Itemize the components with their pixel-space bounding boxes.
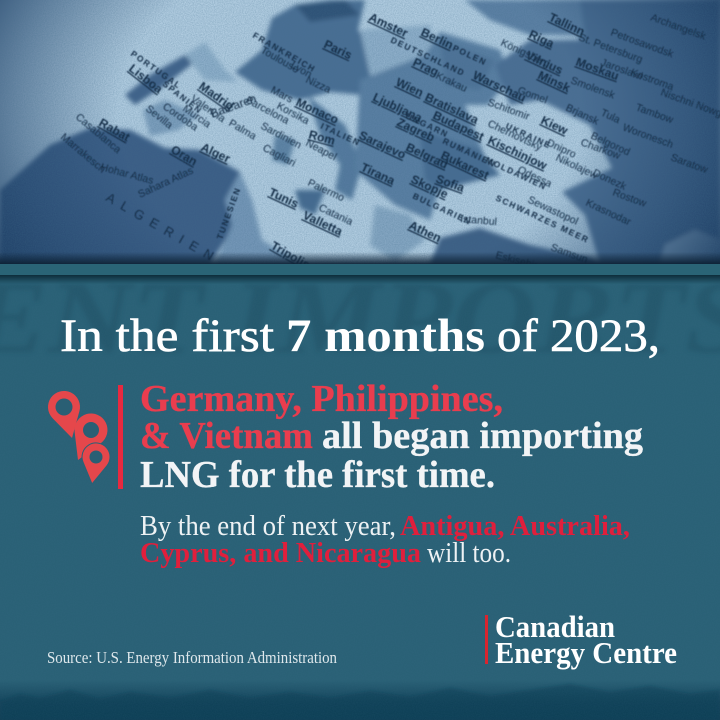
divider band: [0, 264, 720, 284]
map labels: Valencia: [188, 93, 228, 125]
map labels: Balearen: [208, 91, 258, 121]
map labels: Bukarest: [439, 148, 491, 182]
map labels: Gomel: [516, 85, 549, 106]
map labels: Schitomir: [486, 97, 532, 123]
map labels: Sardinien: [259, 120, 304, 152]
map labels: Sofia: [434, 172, 467, 195]
map grain: [0, 0, 720, 264]
main statement: & Vietnam: [140, 415, 313, 457]
map labels: Zagreb: [395, 115, 437, 145]
headline: [60, 310, 660, 362]
map labels: Casablanca: [73, 111, 123, 156]
headline: of 2023,: [497, 310, 660, 362]
headline: In the first: [60, 310, 274, 362]
map labels: Oran: [168, 142, 200, 169]
map labels: Krakau: [434, 70, 469, 95]
logo: Canadian Energy Centre: Energy Centre: [495, 635, 677, 670]
map labels: ITALIEN: [319, 121, 362, 148]
map labels: Tirana: [359, 160, 397, 188]
map labels: Skopje: [409, 172, 451, 201]
map labels: Nizza: [304, 74, 333, 96]
map labels: Barcelona: [244, 94, 291, 127]
map labels: Tallinn: [547, 10, 587, 39]
map labels: Jaroslawl: [599, 57, 644, 83]
map labels: Petrosawodsk: [609, 27, 676, 61]
map labels: Ljubljana: [371, 90, 425, 125]
logo: Canadian Energy Centre: Canadian: [495, 609, 615, 644]
map labels: Madrid: [196, 79, 237, 113]
map labels: Moskau: [574, 55, 621, 83]
map labels: ALGERIEN: [104, 190, 223, 267]
map labels: Valletta: [301, 208, 345, 239]
panel grain: [0, 284, 720, 720]
pin 1: [48, 391, 80, 438]
map bottom shadow: [0, 252, 720, 264]
map labels: Tula: [599, 107, 622, 126]
map labels: Hohar Atlas: [99, 161, 155, 187]
map labels: Belgrad: [404, 140, 450, 172]
map labels: BULGARIEN: [411, 191, 473, 227]
map labels: Rabat: [96, 115, 132, 144]
main statement: LNG for the first time.: [140, 454, 495, 496]
map labels: Donezk: [591, 167, 629, 193]
map labels: Istanbul: [460, 213, 497, 228]
map labels: Sevilla: [143, 103, 175, 132]
map labels: Toulouse: [258, 44, 301, 76]
vignette: [0, 0, 720, 264]
map labels: Minsk: [536, 68, 573, 95]
map labels: Cordoba: [160, 101, 200, 134]
map labels: Warschau: [471, 68, 528, 105]
map labels: Eskisehir: [494, 249, 539, 272]
secondary statement: Cyprus, and Nicaragua: [140, 537, 421, 569]
secondary statement: will too.: [427, 537, 511, 569]
map labels: Nikolajew: [554, 152, 600, 182]
map labels: FRANKREICH: [251, 30, 318, 74]
map labels: Rostow: [611, 187, 648, 210]
map labels: Korsika: [275, 100, 311, 127]
map labels: Prag: [411, 55, 441, 79]
map labels: UNGARN: [404, 111, 450, 139]
map labels: Sewastopol: [526, 194, 580, 228]
map labels: PORTUGAL: [129, 48, 183, 91]
map labels: Lyon: [288, 59, 314, 81]
map labels: Smolensk: [569, 75, 617, 102]
map labels: Tunis: [267, 185, 301, 211]
map labels: Charkow: [579, 137, 622, 162]
main statement: [140, 378, 643, 496]
secondary statement: [140, 510, 630, 569]
map labels: Mars: [269, 84, 295, 106]
map labels: DEUTSCHLAND: [389, 35, 467, 78]
map labels: Berlin: [419, 25, 455, 52]
map labels: Tambow: [634, 102, 675, 126]
main statement: all began importing: [322, 415, 643, 457]
icon: three map pins: [48, 391, 110, 484]
map labels: Brjansk: [564, 102, 601, 128]
map labels: Budapest: [431, 108, 486, 144]
map labels: Amster: [367, 10, 410, 40]
pin 2: [74, 413, 107, 460]
map labels: Monaco: [294, 95, 341, 127]
map labels: Belgorod: [589, 130, 632, 159]
map labels: Cagliari: [261, 142, 298, 169]
map labels: Krasnodar: [584, 197, 633, 228]
red vertical bar: [118, 385, 123, 489]
map labels: Woronesch: [621, 122, 675, 151]
map labels: Kostroma: [629, 67, 675, 93]
map labels: Rom: [307, 127, 337, 148]
map labels: Dnipro: [545, 137, 578, 161]
map labels: Bratislava: [423, 90, 481, 127]
secondary statement: By the end of next year,: [140, 510, 396, 542]
map labels: Samsun: [549, 242, 589, 266]
map labels: Chernovtsky: [486, 118, 544, 154]
source: Source: U.S. Energy Information Administration: [47, 648, 337, 667]
map labels: Catania: [317, 202, 355, 228]
map labels: Königsberg: [499, 37, 552, 70]
map labels: TUNESIEN: [214, 186, 243, 241]
map labels: SPANIEN: [161, 79, 204, 116]
map labels: Vilnius: [524, 48, 565, 77]
map labels: Saratow: [669, 152, 710, 176]
map labels: Lisboa: [126, 61, 166, 96]
map labels: Murcia: [180, 103, 213, 131]
map labels: Marrakesch: [58, 131, 108, 176]
map labels: RUMÄNIEN: [441, 136, 498, 169]
map labels: Riga: [527, 27, 557, 51]
map labels: Wien: [394, 75, 426, 100]
logo: Canadian Energy Centre: [485, 609, 677, 670]
main statement: Germany, Philippines,: [140, 378, 503, 420]
map labels: Kiew: [539, 113, 571, 138]
map labels: St. Petersburg: [577, 32, 644, 66]
map labels: POLEN: [451, 43, 489, 67]
map labels: Tripolis: [268, 238, 313, 272]
map labels: Kischinjow: [486, 133, 550, 173]
map labels: Palermo: [306, 177, 346, 204]
panel: teal background: [0, 264, 720, 720]
map labels: Palma: [226, 117, 258, 143]
map labels: SCHWARZES MEER: [494, 193, 591, 245]
map labels: Sahara Atlas: [136, 165, 195, 201]
map labels: Sarajevo: [357, 128, 408, 162]
pin 3: [82, 443, 110, 484]
map labels: MOLDAWIEN: [484, 155, 549, 192]
secondary statement: Antigua, Australia,: [400, 510, 630, 542]
map labels: Odessa: [516, 164, 554, 190]
headline: 7 months: [286, 310, 485, 362]
map labels: [58, 10, 720, 272]
map labels: Alger: [199, 140, 233, 166]
map labels: Paris: [322, 37, 355, 62]
map labels: Archangelsk: [649, 12, 708, 43]
map labels: Neapel: [304, 137, 339, 163]
bottom tree silhouette: [0, 680, 720, 720]
map labels: UKRAINE: [504, 121, 553, 151]
map photo of Europe: [0, 0, 720, 272]
map labels: Athen: [407, 218, 443, 245]
